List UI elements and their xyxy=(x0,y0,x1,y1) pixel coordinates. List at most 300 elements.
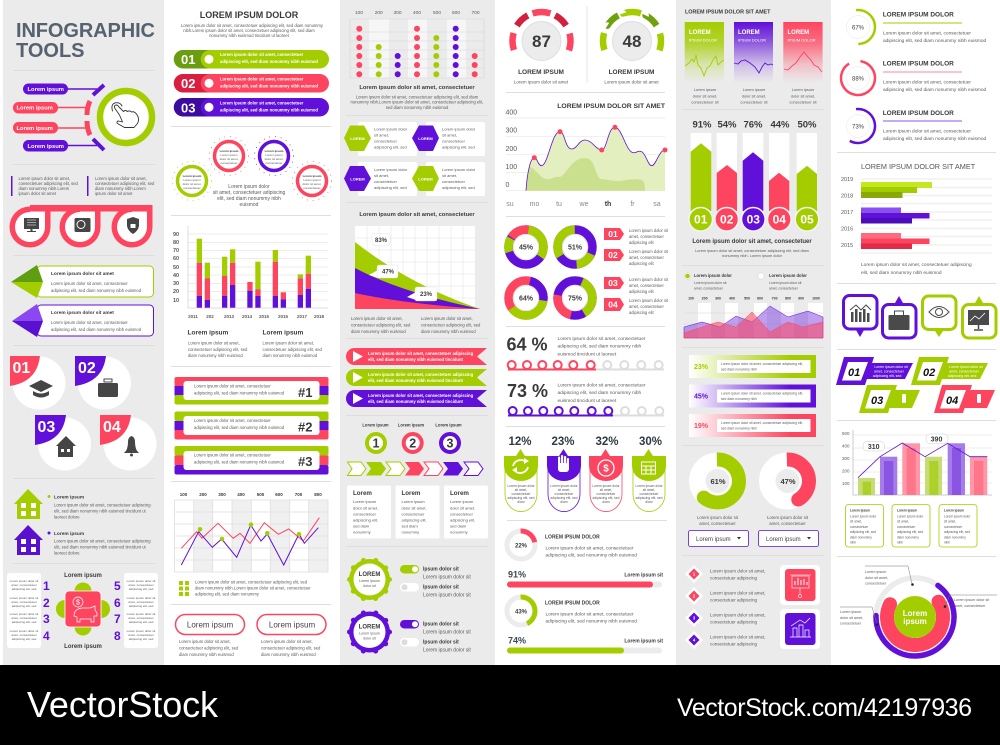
piggy bank list: adipiscing elit, sed xyxy=(12,587,37,591)
callouts xyxy=(369,234,437,301)
piggy bank list: adipiscing elit, sed xyxy=(129,587,154,591)
hexagon cards: adipiscing elit, sed xyxy=(442,185,475,190)
circle cluster: dolor sit amet, xyxy=(220,157,239,161)
ribbon play banners: elit, sed diam nonummy nibh euismod tincidunt xyxy=(368,399,464,404)
ranked banners: Lorem ipsum dolor sit amet, consectetuer xyxy=(194,418,271,423)
arrow column chart: 03 xyxy=(747,212,760,226)
ranked banners: Lorem ipsum dolor sit amet, consectetuer xyxy=(194,384,271,388)
stacked bar chart: 202 xyxy=(206,314,214,319)
gradient line cards: consectetuer sit xyxy=(740,100,769,104)
stacked bar chart: 2017 xyxy=(297,314,308,319)
parallelogram labels: adipiscing elit, sed xyxy=(873,374,901,378)
icon: bell xyxy=(124,436,139,456)
ranked banners: adipiscing elit, sed diam nonummy nibh euismod xyxy=(194,460,285,464)
stacked bar chart: 20 xyxy=(173,289,179,295)
piggy bank list: 2 xyxy=(43,596,50,610)
percent tag cards: 32% xyxy=(595,436,619,448)
percent tag cards: diam xyxy=(645,500,653,504)
text cards: Lorem xyxy=(450,490,469,497)
percent tag cards: adipiscing elit, sed xyxy=(593,496,620,500)
horizontal bar chart: 2016 xyxy=(841,226,853,232)
icon: shield xyxy=(127,217,139,234)
horizontal bar chart: LOREM IPSUM DOLOR SIT AMET xyxy=(861,162,976,171)
numbered pills: adipiscing elit, sed diam nonummy nibh euismod xyxy=(220,108,318,112)
numbered steps xyxy=(362,422,462,452)
text cards: Lorem xyxy=(353,490,372,497)
text cards: nonummy xyxy=(450,530,468,534)
icon: dollar xyxy=(598,460,614,476)
piggy bank list: 1 xyxy=(43,579,50,593)
piggy bank list: 5 xyxy=(114,579,121,593)
numbered pills: 03 xyxy=(181,100,195,116)
dot matrix chart: 200 xyxy=(375,10,383,16)
text cards: adipiscing elit, xyxy=(353,518,378,522)
percent tag cards: diam xyxy=(517,500,525,504)
text block pair: ipsum dolor sit amet xyxy=(18,191,57,196)
title: LOREM IPSUM DOLOR xyxy=(200,10,299,20)
house items: elit, sed diam nonummy nibh euismod tincidunt ut xyxy=(54,544,147,550)
icon: refresh xyxy=(512,458,529,473)
gradient line cards: IPSUM DOLOR xyxy=(738,38,766,42)
layered area chart: consectetuer adipiscing elit, sed xyxy=(351,322,411,328)
gradient line cards: Lorem ipsum xyxy=(694,87,716,92)
gradient percent bars: 45% xyxy=(694,394,709,400)
overlapping area chart: amet, consectetuer xyxy=(694,286,724,290)
outlined pill buttons: consectetuer adipiscing elit, sed xyxy=(261,646,321,650)
numbered pills: adipiscing elit, sed diam nonummy nibh euismod xyxy=(220,84,318,88)
text cards: nonummy xyxy=(353,530,371,534)
icon: briefcase xyxy=(98,379,118,397)
percent tag cards: consectetuer xyxy=(555,492,574,496)
horizontal bar chart: 2018 xyxy=(841,194,853,200)
diamond list: Lorem ipsum dolor sit amet, xyxy=(710,568,766,574)
callouts: 23% xyxy=(420,292,433,298)
overlapping area chart: Lorem ipsum dolor sit xyxy=(694,281,726,285)
area line chart xyxy=(506,103,668,208)
gradient percent bars: Lorem ipsum dolor sit amet, consectetuer adipiscing elit, xyxy=(721,421,803,425)
hexagon cards: sit amet, xyxy=(442,173,457,178)
numbered pills: Lorem ipsum dolor sit amet, consectetuer xyxy=(220,76,304,82)
percent tag cards: Lorem ipsum dolor xyxy=(592,484,621,488)
bead progress 64: 64 % xyxy=(506,334,548,354)
large donuts with dropdowns: amet, consectetuer xyxy=(699,521,736,526)
ranked banners: adipiscing elit, sed diam nonummy nibh euismod xyxy=(194,425,285,430)
outlined text cards: Lorem ipsum dolor xyxy=(850,514,877,518)
outlined text cards: Lorem ipsum xyxy=(944,508,964,512)
circle cluster: Lorem ipsum xyxy=(303,178,321,182)
icon: piggy bank: $ xyxy=(76,600,80,606)
overlapping area chart: 700 xyxy=(772,296,778,300)
large donuts with dropdowns: Lorem ipsum xyxy=(696,537,731,543)
arrow column chart xyxy=(689,120,819,258)
hexagon cards: LOREM xyxy=(350,176,365,182)
diamond list: 1 xyxy=(693,572,696,576)
footer watermark bar xyxy=(0,665,1000,745)
parallelogram labels: adipiscing elit, sed xyxy=(948,374,976,378)
layered area chart: Lorem ipsum dolor sit amet, xyxy=(351,316,403,321)
circle cluster: Lorem ipsum xyxy=(183,178,201,182)
numbered steps: Lorem ipsum xyxy=(362,422,389,428)
arrow column chart: 50% xyxy=(797,120,817,130)
footer watermark bar: VectorStock.com/42197936 xyxy=(677,694,972,722)
chart captions: diam nonummy nibh euismod xyxy=(188,353,243,358)
horizontal bar chart: 2017 xyxy=(841,210,853,216)
gradient line cards: LOREM xyxy=(738,30,760,36)
arrow column chart: 76% xyxy=(743,120,763,130)
arrow card purple: adipiscing elit, sed diam nonummy nibh euismod xyxy=(51,327,142,332)
badge with toggles purple: Ipsum dolor sit xyxy=(423,640,459,646)
parallelogram labels xyxy=(836,357,995,413)
text cards: dolor sit amet, xyxy=(450,506,475,510)
outlined text cards: diam nonummy xyxy=(850,536,872,540)
horizontal bar chart: 2019 xyxy=(841,177,853,183)
numbered bookmarks xyxy=(10,356,156,470)
icon frames xyxy=(844,296,996,338)
badge with toggles green: dolor sit xyxy=(363,584,376,588)
gradient percent bars: 19% xyxy=(694,423,709,430)
radial callout diagram: Lorem ipsum xyxy=(865,570,886,574)
ranked banners: #2 xyxy=(298,420,312,434)
layered area chart: diam nonummy nibh euismod xyxy=(421,329,476,334)
callouts: 83% xyxy=(375,238,388,244)
hexagon cards xyxy=(344,122,485,196)
ring stat list: adipiscing elit, sed diam nonummy nibh euismod xyxy=(883,87,987,93)
panel: column 6 xyxy=(836,9,997,671)
ring stat list: 88% xyxy=(852,76,865,82)
gauge 48: 48 xyxy=(623,32,641,51)
numbered steps: Lorem ipsum xyxy=(398,422,424,428)
parallelogram labels: 01 xyxy=(848,367,860,379)
text cards: nonummy xyxy=(402,530,419,534)
outlined pill buttons: consectetuer adipiscing elit, sed xyxy=(179,646,239,650)
piggy bank list: Lorem ipsum xyxy=(64,573,102,579)
ring stat list: Lorem ipsum dolor sit amet, consectetuer xyxy=(883,30,971,36)
circle cluster: dolor sit amet, xyxy=(183,182,202,186)
area line chart: 300 xyxy=(506,128,517,134)
piggy bank list: adipiscing elit, sed xyxy=(129,620,154,624)
pill labels: Lorem ipsum xyxy=(16,126,53,132)
stacked bar chart: 70 xyxy=(173,248,179,254)
circle cluster: dolor sit amet, xyxy=(265,157,284,161)
text cards: sed diam xyxy=(402,524,418,528)
overlapping area chart: 600 xyxy=(757,296,763,300)
percent tag cards: Lorem ipsum dolor xyxy=(507,484,536,488)
piggy bank list: amet, consectetuer xyxy=(128,600,154,604)
hexagon cards: adipiscing elit, sed xyxy=(374,144,407,150)
donut charts: 64% xyxy=(519,296,534,302)
badge with toggles green: Lorem ipsum dolor sit xyxy=(423,592,471,598)
piggy bank list xyxy=(7,573,158,650)
circle cluster: consectetuer xyxy=(303,186,321,190)
stacked bar chart: 50 xyxy=(173,265,179,271)
area line chart: su xyxy=(506,201,514,208)
outlined text cards: sit amet, xyxy=(897,520,909,524)
ribbon play banners: Lorem ipsum dolor sit amet, consectetuer adipiscing xyxy=(368,372,474,377)
large donuts with dropdowns: Lorem ipsum dolor sit xyxy=(697,515,739,520)
text cards: sed diam xyxy=(450,524,467,528)
numbered steps: Lorem ipsum xyxy=(435,422,462,428)
badge with toggles purple: Lorem ipsum dolor sit xyxy=(423,630,471,636)
gradient percent bars: sed diam nonummy nibh xyxy=(721,368,757,372)
circle cluster: sit amet, consectetuer adipiscing xyxy=(213,190,285,196)
percent tag cards: sit amet, xyxy=(600,488,612,492)
overlapping area chart: amet, consectetuer xyxy=(769,286,799,290)
title: nonummy nibh euismod tincidunt ut laoreet xyxy=(209,33,290,38)
diamond list: 3 xyxy=(693,616,696,620)
diamond list: consectetuer adipiscing xyxy=(710,620,758,624)
percent tag cards: 12% xyxy=(508,436,532,448)
bar and line chart: 100 xyxy=(842,481,850,486)
bar and line chart: 300 xyxy=(842,456,850,461)
stacked bar chart: 80 xyxy=(173,240,179,246)
progress item 22 and 91: 22% xyxy=(515,544,528,550)
circle cluster: Lorem ipsum xyxy=(265,149,284,153)
bead progress 64: adipiscing elit, sed diam nonummy nibh xyxy=(558,344,642,350)
text block pair xyxy=(11,176,155,196)
circle cluster: elit, sed diam nonummy nibh xyxy=(217,196,281,202)
outlined text cards: consectetuer xyxy=(850,525,869,529)
circle cluster: Lorem ipsum xyxy=(183,174,202,178)
ribbon play banners: Lorem ipsum dolor sit amet, consectetuer adipiscing xyxy=(368,393,474,398)
dot matrix chart: 100 xyxy=(355,10,363,16)
ring stat list: Lorem ipsum dolor sit amet, consectetuer xyxy=(883,80,971,86)
pill labels xyxy=(13,84,68,152)
ring stat list: Lorem ipsum dolor sit amet, consectetuer xyxy=(883,128,971,134)
overlapping area chart: 800 xyxy=(785,296,791,300)
arrow card purple: Lorem ipsum dolor sit amet xyxy=(51,310,114,316)
parallelogram labels: Lorem ipsum dolor sit xyxy=(874,365,908,369)
text cards: dolor sit amet, xyxy=(353,506,378,510)
donut charts: 51% xyxy=(568,244,583,252)
house items: Lorem ipsum xyxy=(54,494,84,500)
hexagon cards: consectetuer xyxy=(442,179,466,184)
outlined text cards: consectetuer xyxy=(897,525,916,529)
dot matrix chart: nonummy nibh.Lorem ipsum dolor sit amet, consectetuer adipiscing elit, xyxy=(351,100,483,104)
stacked bar chart: 10 xyxy=(173,298,179,304)
ring stat list: 67% xyxy=(852,26,865,32)
progress item 43 and 74: adipiscing elit, sed nonummy nibh euismod xyxy=(546,618,637,624)
outlined text cards: diam nonummy xyxy=(897,536,919,540)
gauge 87: LOREM IPSUM xyxy=(518,69,564,76)
title: nibh.Lorem ipsum dolor sit amet, consectetuer adipiscing elit, sed diam xyxy=(183,28,315,33)
layered area chart: consectetuer adipiscing elit, sed xyxy=(421,322,481,328)
gauge 48: LOREM IPSUM xyxy=(609,69,654,76)
panel: column 4 xyxy=(502,1,672,654)
badge with toggles green: LOREM xyxy=(359,572,380,578)
radial callout diagram: dolor sit amet, xyxy=(865,576,888,580)
overlapping area chart: 300 xyxy=(715,296,721,300)
large donuts with dropdowns: amet, consectetuer xyxy=(769,521,806,526)
diamond list: Lorem ipsum dolor sit amet, xyxy=(710,590,766,596)
badge with toggles purple: Ipsum dolor sit xyxy=(423,622,459,628)
outlined text cards: adipiscing elit, sed xyxy=(850,530,876,534)
arrow column chart: 01 xyxy=(694,212,708,226)
gradient line cards: LOREM xyxy=(689,30,711,36)
parallelogram labels: 03 xyxy=(871,395,883,407)
red ribbon icons xyxy=(10,205,152,248)
text cards: Lorem ipsum xyxy=(402,499,425,504)
dot matrix chart: 700 xyxy=(471,10,480,16)
line chart: 700 xyxy=(295,492,303,497)
layered area chart: Lorem ipsum dolor sit amet, consectetuer xyxy=(359,212,475,218)
circle cluster: Lorem ipsum dolor xyxy=(228,184,270,190)
percent tag cards: sit amet, xyxy=(643,488,655,492)
text block pair: ipsum dolor sit amet xyxy=(95,191,133,196)
gradient line cards xyxy=(685,10,823,104)
gradient line cards: dolor sit amet, xyxy=(693,94,717,98)
line chart: 600 xyxy=(275,492,283,497)
circle cluster: consectetuer xyxy=(183,186,201,190)
text cards: Lorem ipsum xyxy=(353,499,377,504)
gradient percent bars: 23% xyxy=(694,364,709,371)
text block pair: Lorem ipsum dolor sit amet, xyxy=(18,176,70,181)
numbered tags: 01 xyxy=(608,229,618,239)
badge with toggles green xyxy=(349,559,471,600)
large donuts with dropdowns: 47% xyxy=(780,477,796,486)
icon: calendar xyxy=(642,462,656,474)
area line chart: we xyxy=(579,201,589,208)
piggy bank list: Lorem ipsum dolor sit xyxy=(127,579,156,583)
ring stat list: adipiscing elit, sed diam nonummy nibh euismod xyxy=(883,136,987,142)
horizontal bar chart: 2015 xyxy=(841,243,853,249)
arrow column chart: nonummy nibh. Lorem ipsum dolor xyxy=(722,253,783,258)
outlined pill buttons: Lorem ipsum dolor sit amet, xyxy=(261,639,313,644)
gradient line cards: Lorem ipsum xyxy=(792,87,814,92)
percent tag cards: adipiscing elit, sed xyxy=(636,496,663,500)
numbered pills: Lorem ipsum dolor sit amet, consectetuer xyxy=(220,52,304,57)
text block pair: consectetuer adipiscing elit, sed xyxy=(18,181,79,186)
arrow column chart: Lorem ipsum dolor sit amet, consectetuer adipiscing elit, sed diam xyxy=(695,248,809,253)
ring stat list: 73% xyxy=(852,124,865,130)
numbered tags: amet, consectetuer xyxy=(629,283,664,288)
progress item 43 and 74: Lorem ipsum dolor sit amet, consectetuer xyxy=(546,612,634,618)
house items: laoreet dolore xyxy=(54,550,80,556)
bead progress 73: adipiscing elit, sed diam nonummy nibh xyxy=(558,390,642,396)
badge with toggles green: Ipsum dolor sit xyxy=(423,584,459,590)
gradient line cards: LOREM IPSUM DOLOR SIT AMET xyxy=(685,10,771,16)
pill labels: Lorem ipsum xyxy=(16,106,53,112)
arrow card green xyxy=(11,265,154,298)
circle cluster: euismod xyxy=(240,202,259,208)
numbered pills: 01 xyxy=(181,52,195,67)
outlined pill buttons: diam nonummy nibh euismod xyxy=(179,652,234,657)
hexagon cards: sit amet, xyxy=(374,132,389,138)
diamond list: consectetuer adipiscing xyxy=(710,598,758,602)
ring stat list: LOREM IPSUM DOLOR xyxy=(883,60,954,68)
parallelogram labels: 02 xyxy=(923,367,935,379)
piggy bank list: Lorem ipsum dolor sit xyxy=(10,596,38,600)
stacked bar chart: 2018 xyxy=(314,314,325,319)
circle cluster: Lorem ipsum xyxy=(303,174,322,178)
icon: safe xyxy=(74,218,90,232)
house items: Lorem ipsum dolor sit amet, consectetuer adipiscing xyxy=(54,502,151,508)
chart captions: consectetuer adipiscing elit, sed xyxy=(262,347,323,352)
numbered tags: Lorem ipsum dolor sit xyxy=(629,277,669,282)
numbered tags: adipiscing elit xyxy=(629,261,654,266)
footer watermark bar: VectorStock xyxy=(27,684,219,725)
gradient line cards: LOREM xyxy=(788,30,809,36)
piggy bank list: Lorem ipsum xyxy=(64,644,102,650)
icon: graduation cap xyxy=(29,380,53,398)
ribbon play banners xyxy=(346,348,487,407)
icon: presentation screen xyxy=(968,310,989,330)
piggy bank list: amet, consectetuer xyxy=(128,633,154,637)
hexagon cards: sit amet, xyxy=(374,173,389,178)
hexagon cards: sit amet, xyxy=(442,132,457,138)
outlined text cards: diam nonummy xyxy=(944,536,966,540)
outlined text cards: adipiscing elit, sed xyxy=(944,530,970,534)
ribbon play banners: elit, sed diam nonummy nibh euismod tincidunt xyxy=(368,357,464,362)
percent tag cards: consectetuer xyxy=(512,492,531,496)
badge with toggles purple: Lorem ipsum dolor sit xyxy=(423,648,471,654)
area line chart: th xyxy=(605,201,611,208)
stacked bar chart: 40 xyxy=(173,273,179,279)
piggy bank list: Lorem ipsum dolor sit xyxy=(10,579,38,583)
progress item 22 and 91: Lorem ipsum sit xyxy=(624,572,663,578)
outlined pill buttons: Lorem ipsum xyxy=(269,620,315,630)
house items: laoreet dolore xyxy=(54,514,80,520)
legend note: adipiscing elit, sed diam nonummy xyxy=(195,592,260,596)
piggy bank list: amet, consectetuer xyxy=(128,616,154,620)
outlined text cards xyxy=(846,504,977,547)
outlined text cards: nibh xyxy=(850,540,856,544)
gradient line cards: consectetuer sit xyxy=(691,100,720,104)
bead progress 64 xyxy=(506,334,664,370)
text block pair: diam nonummy nibh.Lorem xyxy=(95,186,146,191)
percent tag cards: consectetuer xyxy=(597,492,616,496)
large donuts with dropdowns xyxy=(688,452,818,546)
numbered tags: Lorem ipsum dolor sit xyxy=(629,228,669,233)
text cards: adipiscing elit, xyxy=(450,518,475,522)
gradient percent bars: sed diam nonummy nibh xyxy=(721,397,757,401)
donut charts: 75% xyxy=(568,296,583,302)
piggy bank list: amet, consectetuer xyxy=(11,616,37,620)
hexagon cards: adipiscing elit, sed xyxy=(442,144,475,150)
overlapping area chart: 400 xyxy=(729,296,735,300)
percent tag cards: consectetuer xyxy=(640,492,659,496)
gradient percent bars: Lorem ipsum dolor sit amet, consectetuer adipiscing elit, xyxy=(721,362,803,366)
percent tag cards: sit amet, xyxy=(515,488,527,492)
large donuts with dropdowns: Lorem ipsum xyxy=(766,537,801,543)
numbered tags: Lorem ipsum dolor sit xyxy=(629,298,669,303)
area line chart: fr xyxy=(630,201,635,208)
arrow card purple: Lorem ipsum dolor sit amet, consectetuer xyxy=(51,320,128,325)
arrow column chart: 04 xyxy=(773,212,786,226)
callouts: 47% xyxy=(382,270,395,276)
numbered tags xyxy=(604,228,669,315)
hexagon cards: LOREM xyxy=(418,176,433,182)
layered area chart: diam nonummy nibh euismod xyxy=(351,329,406,334)
dot matrix chart: 300 xyxy=(393,10,402,16)
ranked banners: Lorem ipsum dolor sit amet, consectetuer xyxy=(194,452,271,458)
line chart: 300 xyxy=(218,492,226,497)
arrow column chart: 44% xyxy=(770,120,790,130)
area line chart: 200 xyxy=(506,146,517,153)
numbered tags: 02 xyxy=(608,250,618,260)
numbered tags: 04 xyxy=(608,300,618,310)
dot matrix chart: Lorem ipsum dolor sit amet, consectetuer xyxy=(359,85,475,91)
legend note: diam nonummy nibh.Lorem ipsum dolor sit amet, consectetuer xyxy=(195,586,311,590)
arrow column chart: 54% xyxy=(717,120,737,130)
gradient line cards: consectetuer sit xyxy=(789,100,818,104)
percent tag cards: 23% xyxy=(551,436,575,448)
bead progress 73: euismod tincidunt ut laoreet xyxy=(558,398,617,404)
numbered tags: adipiscing elit xyxy=(629,289,654,294)
progress item 22 and 91: Lorem ipsum dolor sit amet, consectetuer xyxy=(546,546,634,552)
ranked banners: adipiscing elit, sed diam nonummy nibh euismod xyxy=(194,390,285,396)
outlined text cards: nibh xyxy=(897,540,903,544)
bar and line chart: 400 xyxy=(842,444,850,448)
